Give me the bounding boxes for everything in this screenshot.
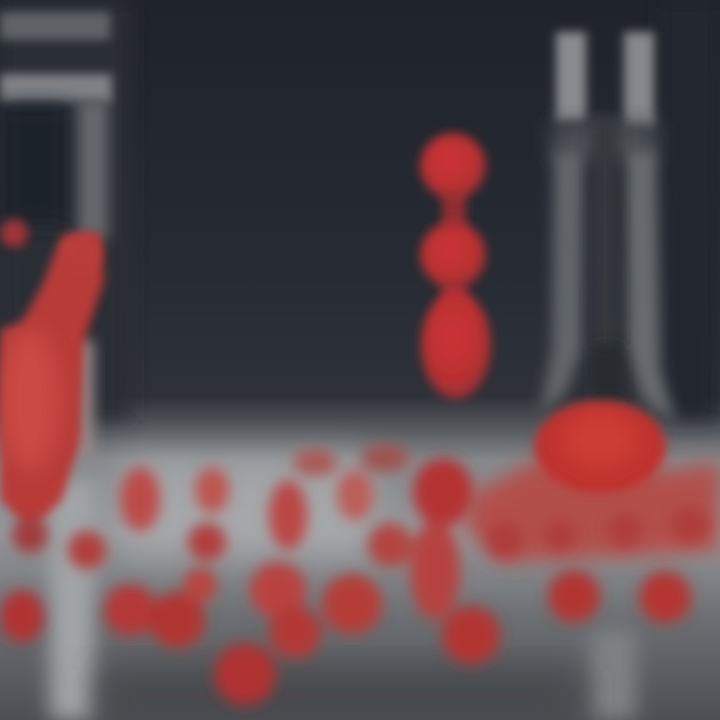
- left glass cylinder: [0, 12, 112, 460]
- scattered red spheres: [0, 444, 691, 705]
- right glass flask: [540, 32, 676, 425]
- red liquid in flask: [534, 401, 666, 493]
- red pile under flask: [465, 462, 720, 562]
- falling red spheres: [420, 133, 491, 399]
- red liquid in left glass: [0, 219, 104, 553]
